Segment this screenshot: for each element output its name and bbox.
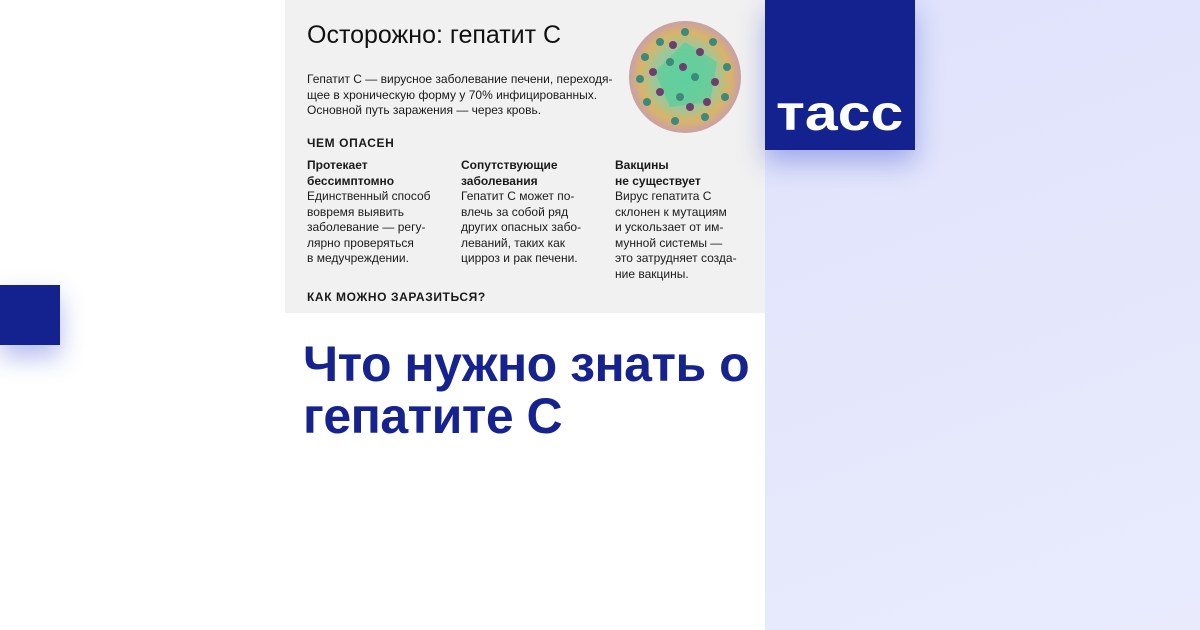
decorative square left — [0, 285, 60, 345]
column 2: других опасных забо- — [461, 220, 581, 234]
column 1: Протекает — [307, 158, 368, 172]
heading: Осторожно: гепатит С — [307, 21, 561, 49]
column 1: Единственный способ — [307, 189, 431, 203]
logo: TASS: тасс — [776, 85, 903, 141]
icon: virus — [629, 21, 741, 133]
column 1: лярно проверяться — [307, 236, 414, 250]
logo: TASS — [765, 0, 915, 150]
column 2: заболевания — [461, 174, 538, 188]
intro text: щее в хроническую форму у 70% инфицированных. — [307, 88, 597, 102]
column 3 — [615, 158, 737, 280]
column 3: склонен к мутациям — [615, 204, 727, 218]
panel: infographic preview — [285, 0, 765, 313]
column 2: влечь за собой ряд — [461, 204, 568, 218]
column 1: заболевание — регу- — [307, 220, 425, 234]
column 3: мунной системы — — [615, 236, 722, 250]
background right — [765, 0, 1200, 630]
main title: Что нужно знать о — [303, 336, 749, 392]
intro text: Гепатит С — вирусное заболевание печени, переходя- — [307, 72, 613, 86]
intro text — [307, 72, 613, 117]
column 3: это затрудняет созда- — [615, 251, 737, 265]
column 1: бессимптомно — [307, 174, 394, 188]
column 2: Сопутствующие — [461, 158, 558, 172]
intro text: Основной путь заражения — через кровь. — [307, 103, 541, 117]
column 3: Вирус гепатита С — [615, 189, 711, 203]
column 2: леваний, таких как — [461, 236, 565, 250]
section heading: danger: ЧЕМ ОПАСЕН — [307, 136, 394, 150]
column 2: Гепатит С может по- — [461, 189, 574, 203]
column 1: вовремя выявить — [307, 204, 404, 218]
main title: гепатите С — [303, 388, 562, 444]
column 2: цирроз и рак печени. — [461, 251, 578, 265]
section heading: infection: КАК МОЖНО ЗАРАЗИТЬСЯ? — [307, 290, 486, 304]
column 1: в медучреждении. — [307, 251, 409, 265]
main title — [303, 336, 749, 444]
column 3: не существует — [615, 174, 701, 188]
column 2 — [461, 158, 581, 265]
column 3: Вакцины — [615, 158, 669, 172]
column 3: и ускользает от им- — [615, 220, 723, 234]
column 1 — [307, 158, 431, 265]
column 3: ние вакцины. — [615, 266, 689, 280]
